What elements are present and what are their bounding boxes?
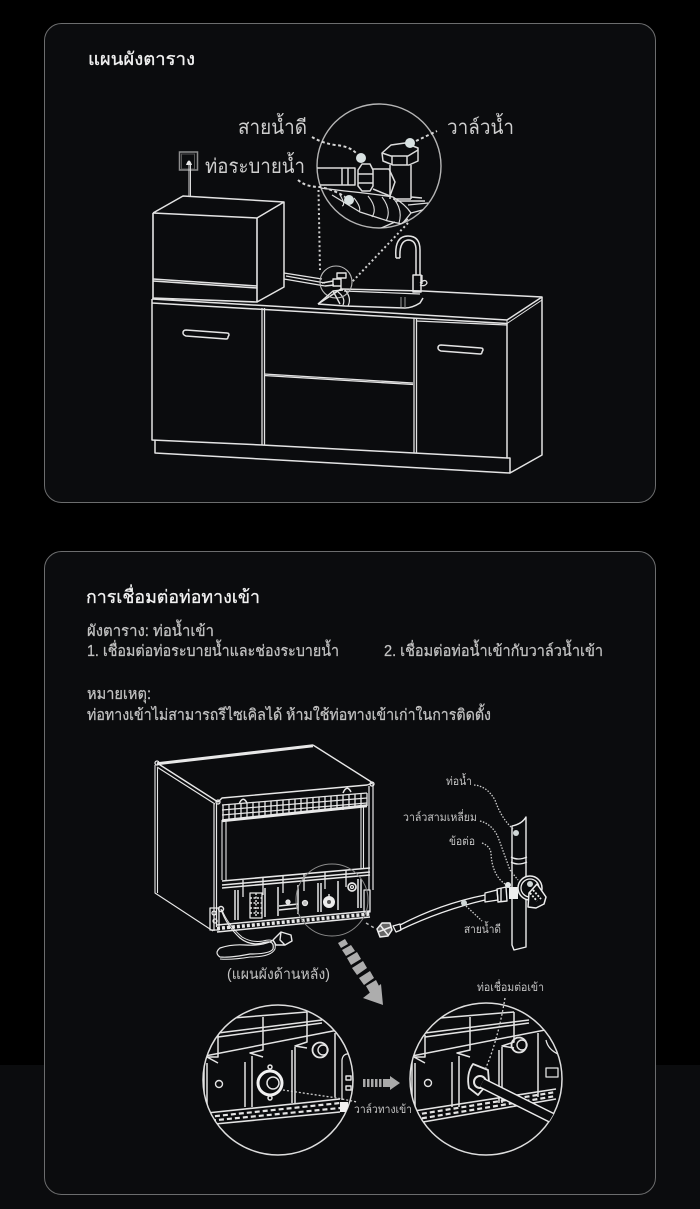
panel: floor plan <box>44 24 656 502</box>
panel: inlet hose connection <box>44 552 656 1194</box>
callout: three-way valve <box>403 809 533 887</box>
upper vent grille <box>222 788 367 822</box>
dishwasher housing <box>155 745 374 931</box>
detail circle: connected inlet hose <box>410 998 562 1155</box>
instructions text: ท่อทางเข้าไม่สามารถรีไซเคิลได้ ห้ามใช้ท่อทางเข้าเก่าในการติดตั้ง <box>87 703 491 724</box>
callouts: inlet hose parts <box>403 773 533 936</box>
magnified valve detail <box>317 104 441 235</box>
caption: rear view: (แผนผังด้านหลัง) <box>227 966 330 983</box>
magnifier circle outline <box>296 864 368 936</box>
callout: connector: ข้อต่อ <box>449 835 475 848</box>
cabinet body <box>152 291 542 473</box>
heading: inlet hose connection: การเชื่อมต่อท่อทางเข้า <box>86 584 260 607</box>
instructions text: ผังตาราง: ท่อน้ำเข้า <box>87 619 214 640</box>
kitchen cabinet illustration <box>152 196 542 473</box>
callout: water hose: สายน้ำดี <box>464 921 501 936</box>
inlet hose and wall pipe <box>377 817 546 950</box>
callout: drain pipe <box>205 152 354 205</box>
heading: floor plan: แผนผังตาราง <box>88 49 195 69</box>
callout: water valve <box>405 113 514 148</box>
dishwasher rear view <box>155 745 374 959</box>
arrow: before to after <box>363 1076 400 1090</box>
detail circle: inlet valve <box>203 1005 357 1155</box>
callout: drain pipe: ท่อระบายน้ำ <box>205 152 305 178</box>
callout: water valve: วาล์วน้ำ <box>447 113 514 139</box>
instructions text: 2. เชื่อมต่อท่อน้ำเข้ากับวาล์วน้ำเข้า <box>384 639 603 660</box>
dotted link to arrow <box>366 923 376 929</box>
nut <box>382 143 418 165</box>
power socket <box>180 152 198 196</box>
lower panel with ports <box>210 868 370 932</box>
callout: connector <box>449 835 511 888</box>
label: inlet connection pipe: ท่อเชื่อมต่อเข้า <box>477 979 544 994</box>
callout: water pipe <box>446 773 519 836</box>
callout: water hose: สายน้ำดี <box>238 113 307 139</box>
callout: water hose <box>461 900 501 936</box>
pipe and coupling <box>317 168 355 185</box>
power cord and plug <box>217 909 292 959</box>
dishwasher <box>153 196 284 302</box>
callout: water hose <box>238 113 366 163</box>
instructions text: หมายเหตุ: <box>87 686 151 704</box>
instructions text: 1. เชื่อมต่อท่อระบายน้ำและช่องระบายน้ำ <box>87 639 339 660</box>
small magnified circle <box>318 266 352 304</box>
arrow: dashed down to detail views <box>338 939 383 1005</box>
instructions text <box>87 619 603 724</box>
label: inlet valve: วาล์วทางเข้า <box>354 1102 412 1116</box>
sink and faucet <box>284 236 427 308</box>
hose <box>320 188 411 224</box>
dotted leaders to magnified view <box>318 190 408 282</box>
callout: three-way valve: วาล์วสามเหลี่ยม <box>403 809 477 824</box>
callout: water pipe: ท่อน้ำ <box>446 773 472 788</box>
